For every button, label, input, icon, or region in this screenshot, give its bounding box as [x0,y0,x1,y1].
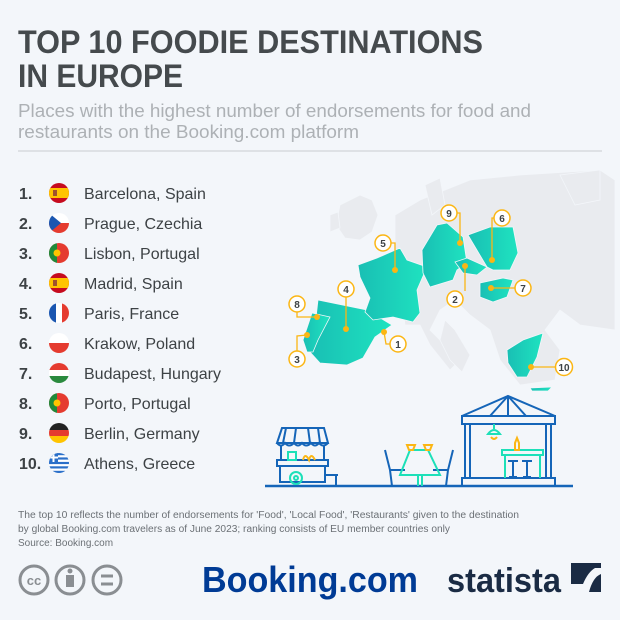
flags [49,183,69,473]
subtitle [18,101,531,142]
gazebo [462,396,555,486]
illustration: food cart, table, gazebo [265,396,573,486]
list of destinations: 6. [19,336,32,353]
text: 1 [395,340,401,351]
poland [468,227,518,270]
cc icons [20,566,121,594]
statista logo: statista [447,562,562,600]
list of destinations: 3. [19,246,32,263]
footnote: The top 10 reflects the number of endorsements for 'Food', 'Local Food', 'Restaurants' given to the destination [18,510,519,521]
list of destinations: Krakow, Poland [84,336,195,353]
text: 10 [558,363,570,374]
list of destinations: Budapest, Hungary [84,366,221,383]
list of destinations: Prague, Czechia [84,216,202,233]
list of destinations: Madrid, Spain [84,276,183,293]
spain [310,300,392,365]
text: 4 [343,285,349,296]
list of destinations: Berlin, Germany [84,426,200,443]
footnote [18,510,519,549]
text: 6 [499,214,505,225]
hungary [480,278,513,302]
text: 2 [452,295,458,306]
list of destinations: 7. [19,366,32,383]
title: IN EUROPE [18,58,183,94]
france [358,248,427,322]
title [18,24,483,94]
text: 5 [380,239,386,250]
title: TOP 10 FOODIE DESTINATIONS [18,24,483,60]
subtitle: restaurants on the Booking.com platform [18,122,359,142]
list of destinations: 2. [19,216,32,233]
list of destinations: 10. [19,456,41,473]
germany [422,223,467,287]
subtitle: Places with the highest number of endorsements for food and [18,101,531,121]
table [385,445,453,486]
list of destinations: 5. [19,306,32,323]
footnote: by global Booking.com travelers as of June 2023; ranking consists of EU member countries only [18,524,450,535]
list of destinations: Paris, France [84,306,179,323]
cc icons: cc [27,573,41,588]
cart [277,428,338,486]
map background: europe [330,170,615,385]
booking.com logo: Booking.com [202,559,418,600]
portugal [303,313,330,352]
list of destinations: 8. [19,396,32,413]
list of destinations: Porto, Portugal [84,396,191,413]
map markers [297,213,556,367]
list of destinations: Athens, Greece [84,456,195,473]
list of destinations: 9. [19,426,32,443]
map: highlighted countries [303,223,552,391]
list of destinations: 4. [19,276,32,293]
text: 7 [520,284,526,295]
list of destinations: Barcelona, Spain [84,186,206,203]
source: Source: Booking.com [18,538,113,549]
text: 8 [294,300,300,311]
list of destinations: Lisbon, Portugal [84,246,200,263]
text: 3 [294,355,300,366]
greece [507,333,543,377]
list of destinations: 1. [19,186,32,203]
text: 9 [446,209,452,220]
czechia [455,258,487,275]
list of destinations [19,186,221,473]
